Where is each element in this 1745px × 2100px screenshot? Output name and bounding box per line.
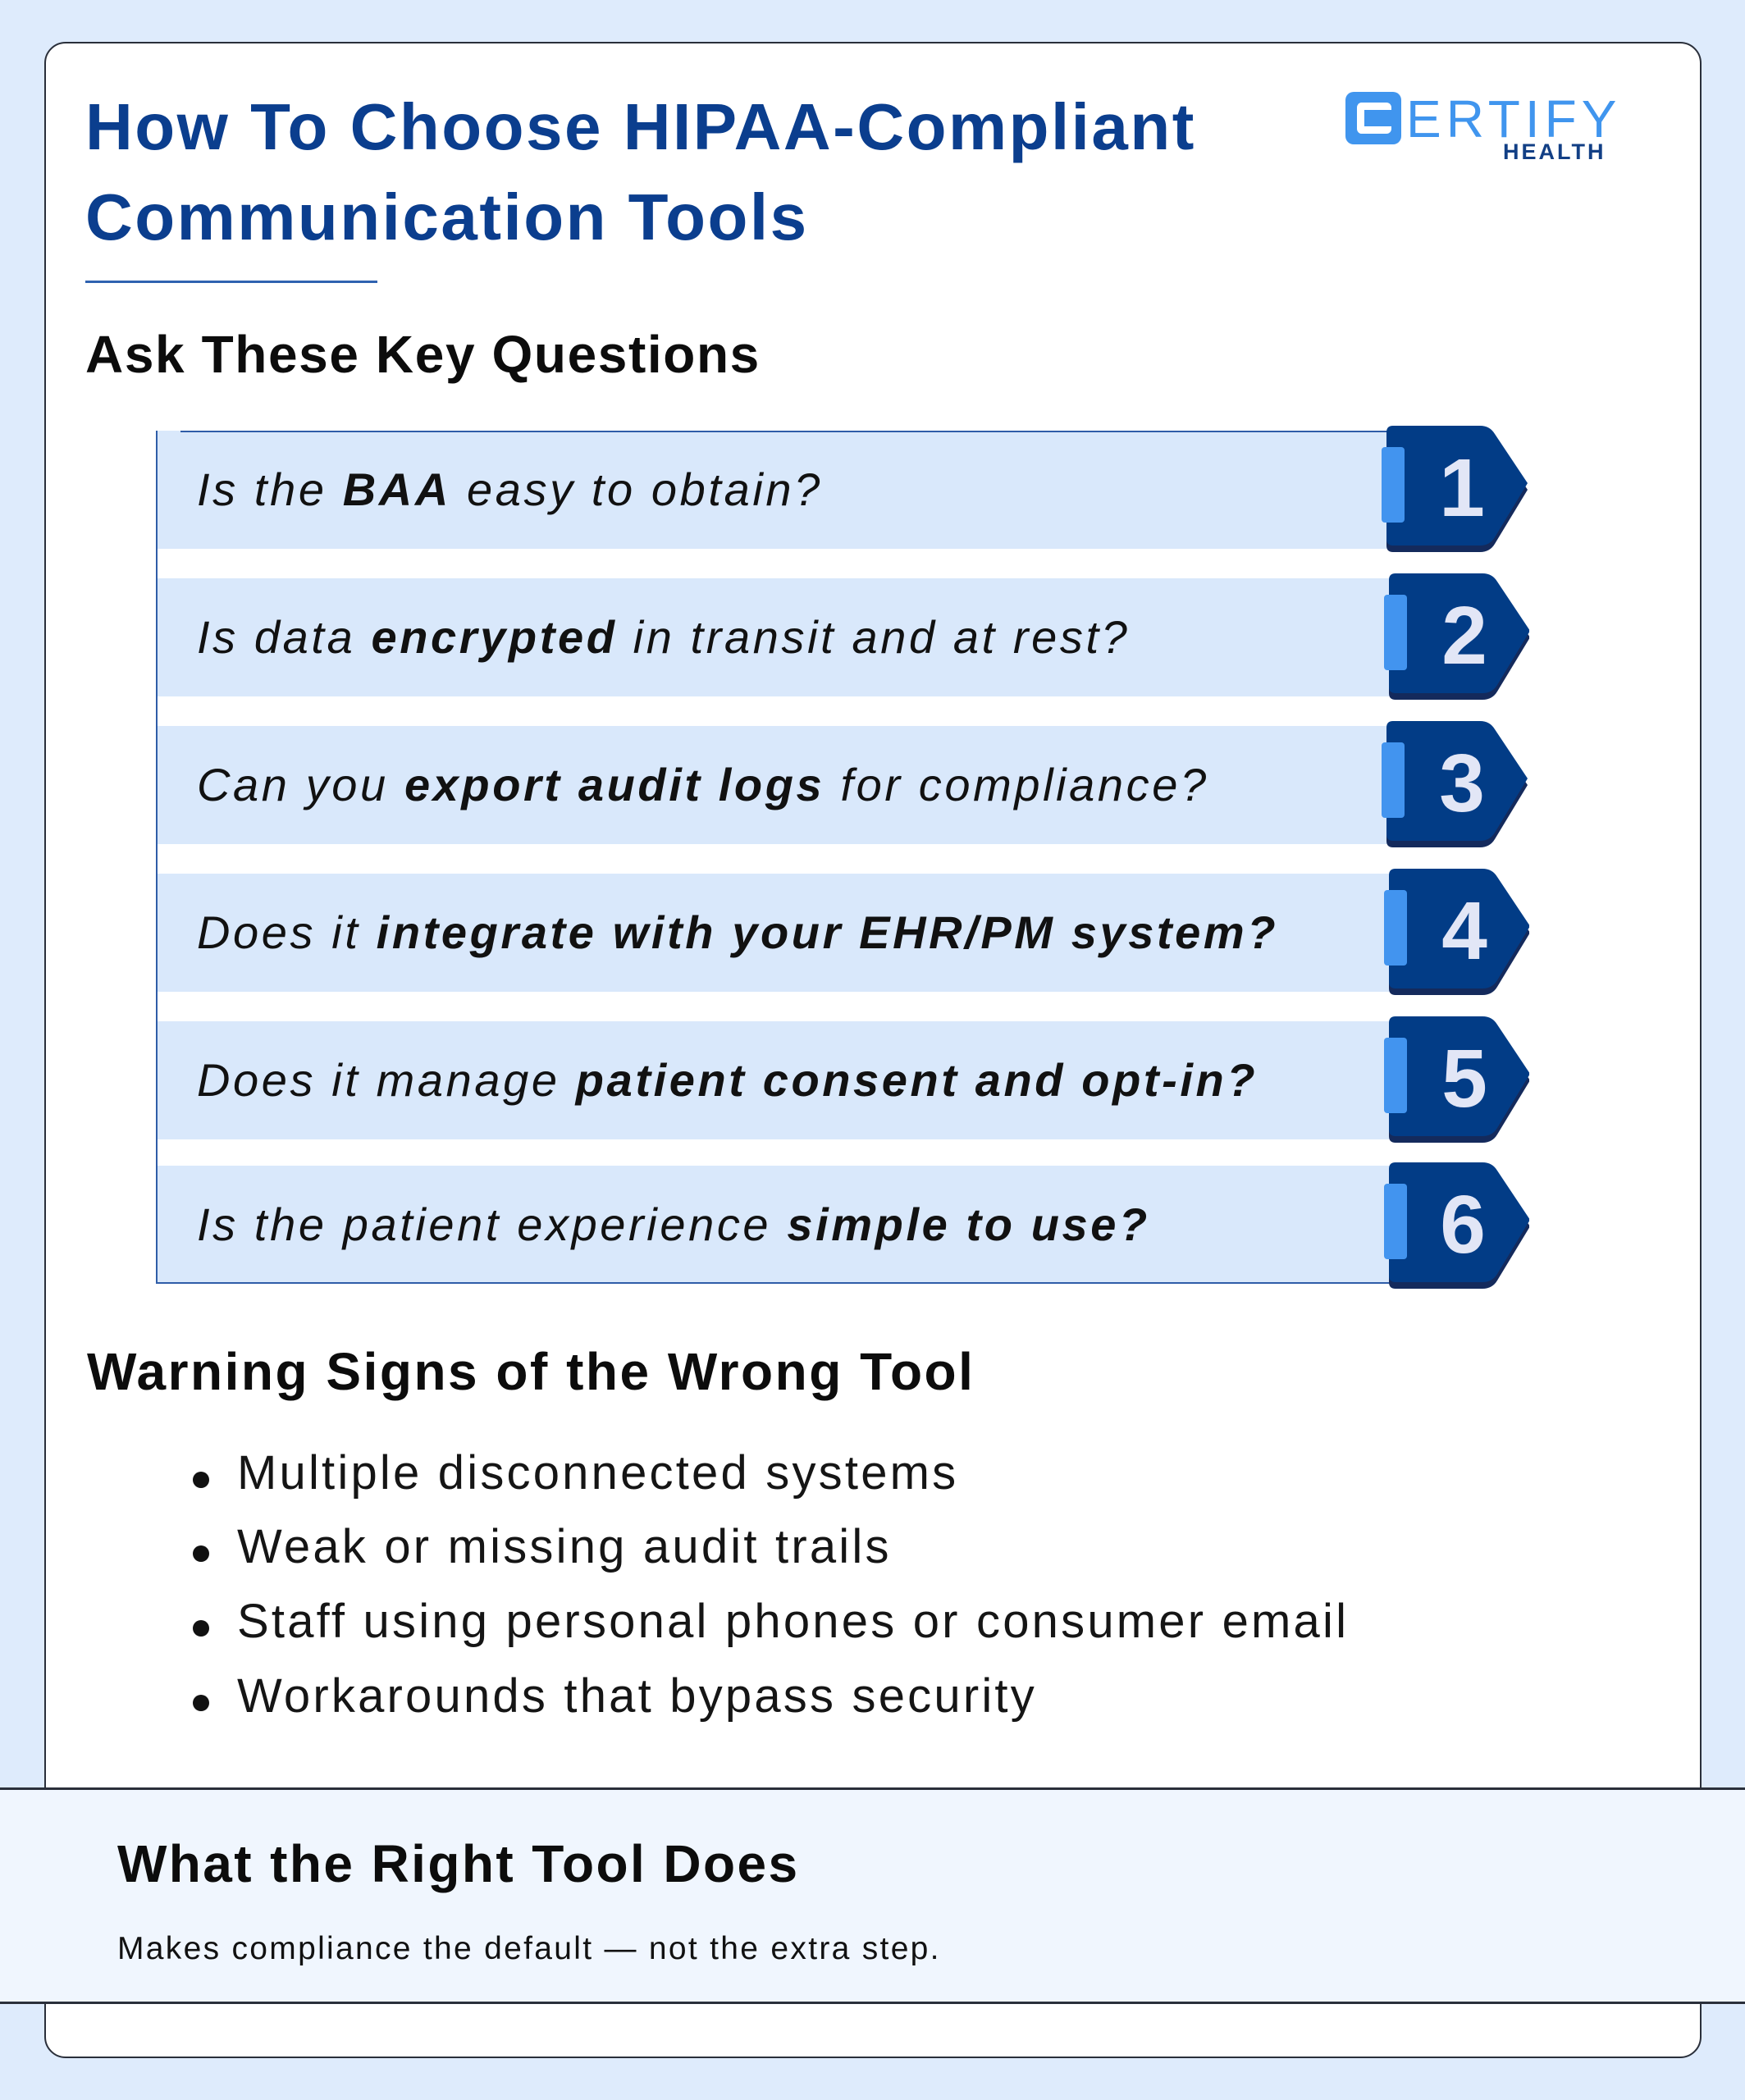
row 4: Does it integrate with your EHR/PM system? <box>197 906 1278 958</box>
row 4 <box>156 874 1395 992</box>
badge 4 <box>1384 869 1530 995</box>
logo C box <box>1345 92 1401 144</box>
title <box>85 90 1196 253</box>
badge 5: 5 <box>1441 1033 1487 1125</box>
bullet list: Workarounds that bypass security <box>237 1669 1037 1723</box>
row 6: Is the patient experience simple to use? <box>197 1198 1150 1250</box>
badge 6: 6 <box>1440 1179 1486 1271</box>
bullet list: Staff using personal phones or consumer email <box>237 1595 1349 1648</box>
row 5: Does it manage patient consent and opt-in? <box>197 1054 1258 1106</box>
badges <box>1382 426 1529 1289</box>
bullet list: Weak or missing audit trails <box>237 1520 892 1573</box>
bottom band <box>0 1787 1745 2004</box>
logo: HEALTH <box>1503 139 1606 164</box>
badge 1 <box>1382 426 1528 552</box>
row 3 <box>156 726 1395 844</box>
badge 6 <box>1384 1162 1530 1289</box>
row 2: Is data encrypted in transit and at rest? <box>197 611 1130 663</box>
row 1: Is the BAA easy to obtain? <box>197 463 823 515</box>
row 1 <box>156 431 1395 549</box>
badge 5 <box>1384 1016 1530 1143</box>
badge 3: 3 <box>1439 737 1485 829</box>
heading: ask these key questions: Ask These Key Questions <box>85 325 761 384</box>
row 3: Can you export audit logs for compliance? <box>197 759 1209 810</box>
row 6 <box>156 1166 1395 1284</box>
band text: Makes compliance the default — not the extra step. <box>117 1931 941 1966</box>
bullet list <box>193 1446 1349 1723</box>
question list <box>156 426 1529 1289</box>
badge 1: 1 <box>1439 442 1485 534</box>
heading: warning signs: Warning Signs of the Wrong Tool <box>87 1342 975 1401</box>
title: Communication Tools <box>85 180 809 253</box>
logo text: ERTIFY <box>1406 89 1621 148</box>
badge 2: 2 <box>1441 590 1487 682</box>
bullet list: Multiple disconnected systems <box>237 1446 958 1500</box>
band heading: What the Right Tool Does <box>117 1834 799 1893</box>
badge 2 <box>1384 573 1530 700</box>
row 5 <box>156 1021 1395 1139</box>
badge 3 <box>1382 721 1528 847</box>
badge 4: 4 <box>1441 885 1487 977</box>
row 2 <box>156 578 1395 696</box>
title: How To Choose HIPAA-Compliant <box>85 90 1196 163</box>
logo <box>1345 89 1621 164</box>
